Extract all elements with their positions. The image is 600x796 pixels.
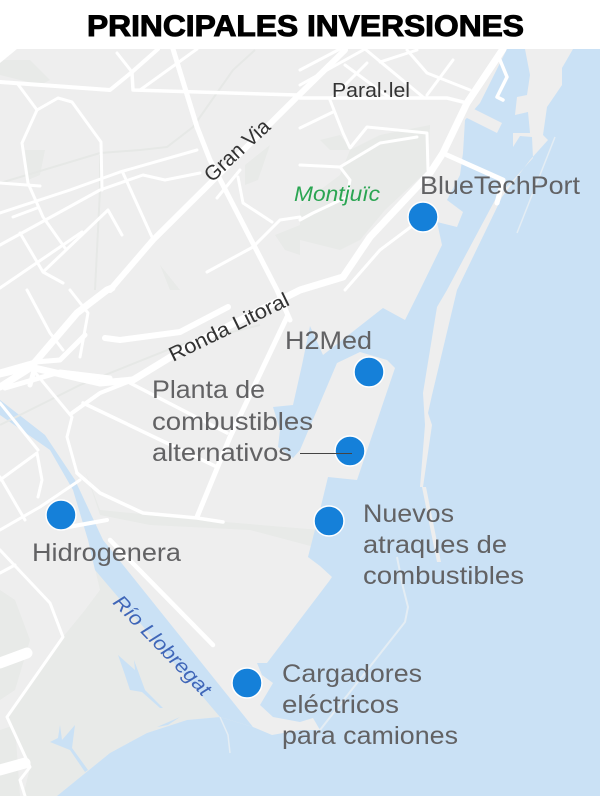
label: Planta de combustibles alternativos: combustibles [152, 408, 313, 436]
street label: Ronda Litoral: Ronda Litoral [165, 288, 293, 366]
label: Hidrogenera: Hidrogenera [32, 539, 181, 567]
park areas [0, 60, 430, 796]
label: Nuevos atraques de combustibles: atraques de [363, 531, 507, 559]
label: Cargadores eléctricos para camiones [282, 660, 458, 750]
thin sea walls [220, 137, 555, 753]
label: Nuevos atraques de combustibles [363, 500, 524, 590]
river label: Río Llobregat: Río Llobregat [108, 591, 216, 702]
label: Planta de combustibles alternativos: Planta de [152, 376, 265, 404]
roads [0, 49, 507, 796]
label: Nuevos atraques de combustibles: combustibles [363, 562, 524, 590]
label: Planta de combustibles alternativos [152, 376, 313, 467]
railway lines [0, 50, 260, 425]
marker: Hidrogenera [46, 500, 76, 530]
label: Cargadores eléctricos para camiones: eléctricos [282, 691, 399, 719]
marker: BlueTechPort [408, 202, 438, 232]
breakwater and piers [420, 49, 573, 562]
label: Planta de combustibles alternativos: alternativos [152, 439, 292, 467]
marker: combustibles alternativos [335, 436, 365, 466]
street label: Gran Via: Gran Via [200, 115, 275, 187]
marker: Nuevos atraques [314, 506, 344, 536]
label: Nuevos atraques de combustibles: Nuevos [363, 500, 454, 528]
label: H2Med: H2Med [285, 327, 372, 355]
leader line [300, 452, 352, 454]
label: Cargadores eléctricos para camiones: Cargadores [282, 660, 422, 688]
title: PRINCIPALES INVERSIONES [87, 10, 524, 43]
label: Cargadores eléctricos para camiones: para camiones [282, 722, 458, 750]
top-left white corner [0, 49, 17, 63]
park label: Montjuïc: Montjuïc [294, 183, 381, 206]
marker: Cargadores [232, 668, 262, 698]
label: BlueTechPort: BlueTechPort [420, 172, 580, 200]
marker: H2Med [354, 357, 384, 387]
street label: Paral·lel: Paral·lel [332, 79, 410, 102]
